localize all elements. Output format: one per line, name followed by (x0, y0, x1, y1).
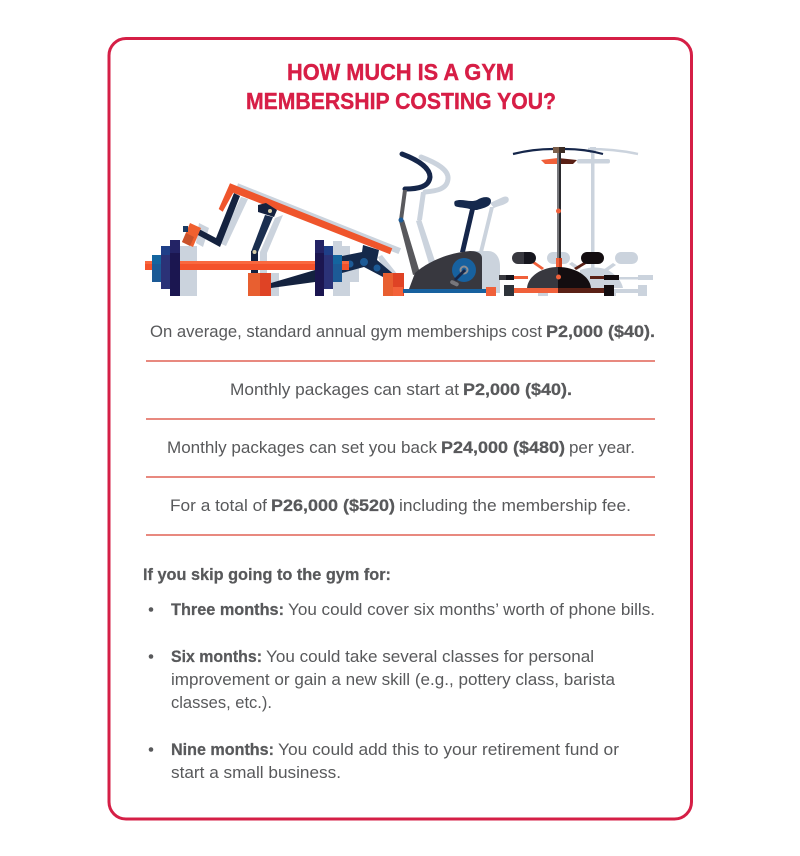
illustration: gym equipment (145, 147, 653, 296)
text block: monthly packages start: P2,000 ($40). (463, 380, 572, 399)
text block: monthly packages per year: Monthly packages can set you back (167, 438, 438, 457)
list item: nine months: You could add this to your retirement fund or (278, 740, 619, 759)
icon: barbell (145, 240, 349, 296)
title: MEMBERSHIP COSTING YOU? (246, 88, 556, 114)
icon: exercise bike (398, 154, 496, 296)
text block: monthly packages per year (167, 438, 635, 457)
list item: six months: You could take several classes for personal (266, 647, 594, 666)
text block: average annual cost: P2,000 ($40). (546, 322, 655, 341)
heading: if you skip: If you skip going to the gym for: (143, 565, 391, 584)
text block: total: P26,000 ($520) (271, 496, 395, 515)
list item: six months: Six months: (171, 647, 262, 666)
text block: total (170, 496, 631, 515)
list item: nine months: start a small business. (171, 763, 341, 782)
text block: average annual cost: On average, standard annual gym memberships cost (150, 322, 542, 341)
text block: total: For a total of (170, 496, 267, 515)
panel: card border (109, 38, 692, 819)
icon: equipment grey shadows (180, 147, 653, 296)
title: HOW MUCH IS A GYM (287, 59, 514, 85)
text block: monthly packages per year: per year. (569, 438, 635, 457)
title (246, 59, 556, 114)
text block: total: including the membership fee. (399, 496, 631, 515)
list item: six months (149, 647, 616, 712)
list item: nine months: Nine months: (171, 740, 274, 759)
list item: three months: You could cover six months’ worth of phone bills. (288, 600, 655, 619)
icon: incline bench (182, 183, 404, 296)
list item: nine months (149, 740, 619, 782)
text block: monthly packages per year: P24,000 ($480) (441, 438, 565, 457)
list item: six months: classes, etc.). (171, 693, 272, 712)
text block: monthly packages start (230, 380, 572, 399)
icon: cable machine (499, 147, 619, 296)
list item: three months: Three months: (171, 600, 284, 619)
list item: six months: improvement or gain a new skill (e.g., pottery class, barista (171, 670, 616, 689)
text block: monthly packages start: Monthly packages can start at (230, 380, 459, 399)
